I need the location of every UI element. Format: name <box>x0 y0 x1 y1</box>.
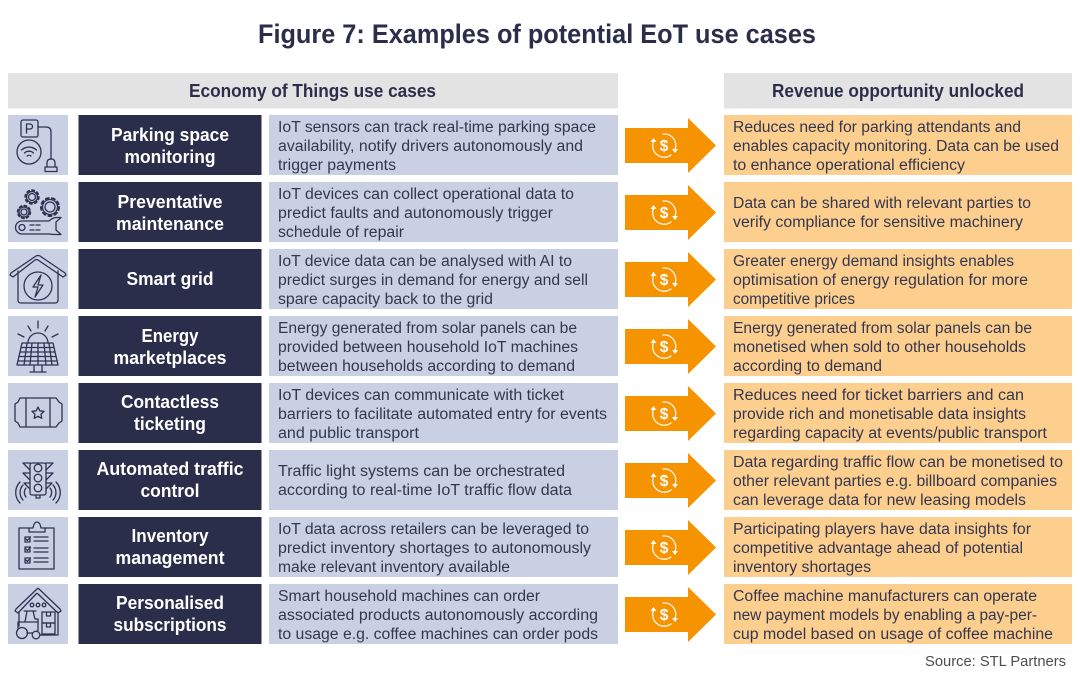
icon: warehouse and forklift <box>15 588 61 639</box>
arrow: $ <box>660 272 669 289</box>
revenue text: cup model based on usage of coffee machine <box>733 626 1053 643</box>
arrow: $ <box>660 607 669 624</box>
name: maintenance <box>116 214 224 234</box>
name <box>114 593 226 635</box>
source: Source: STL Partners <box>925 654 1066 670</box>
name: monitoring <box>124 147 216 167</box>
icon: house with bolt <box>10 256 66 303</box>
revenue text: inventory shortages <box>733 559 871 576</box>
description: IoT devices can communicate with ticket <box>278 387 565 404</box>
description: predict faults and autonomously trigger <box>278 205 553 222</box>
name: Personalised <box>116 593 224 613</box>
arrow <box>625 386 716 441</box>
revenue text: provide rich and monetisable data insights <box>733 406 1026 423</box>
description: IoT devices can collect operational data to <box>278 186 574 203</box>
name: Contactless <box>121 392 219 412</box>
name: Preventative <box>118 192 222 212</box>
name: control <box>140 481 200 501</box>
row 5: contactless ticketing <box>8 383 1072 443</box>
description: IoT device data can be analysed with AI to <box>278 253 572 270</box>
revenue text: other relevant parties e.g. billboard companies <box>733 473 1057 490</box>
description: schedule of repair <box>278 224 404 241</box>
description: predict surges in demand for energy and sell <box>278 272 588 289</box>
description: Smart household machines can order <box>278 588 540 605</box>
description <box>278 186 574 241</box>
revenue text: verify compliance for sensitive machinery <box>733 214 1023 231</box>
description <box>278 463 572 499</box>
arrow <box>625 185 716 240</box>
row 2: preventative maintenance <box>8 182 1072 242</box>
description <box>278 253 588 308</box>
revenue text: Greater energy demand insights enables <box>733 253 1014 270</box>
icon: clipboard <box>19 522 54 569</box>
arrow <box>625 453 716 508</box>
icon: solar panel <box>17 321 58 372</box>
arrow <box>625 252 716 307</box>
revenue text <box>733 588 1053 643</box>
description: IoT sensors can track real-time parking space <box>278 119 596 136</box>
revenue text: according to demand <box>733 358 882 375</box>
arrow: $ <box>660 406 669 423</box>
description: barriers to facilitate automated entry for events <box>278 406 607 423</box>
revenue text: Participating players have data insights for <box>733 521 1031 538</box>
name <box>96 459 244 501</box>
name: Smart grid <box>126 269 214 289</box>
arrow: $ <box>660 339 669 356</box>
header: use cases: Economy of Things use cases <box>189 81 436 101</box>
arrow: $ <box>660 138 669 155</box>
header: use cases <box>8 73 618 108</box>
name <box>111 125 229 167</box>
description <box>278 588 598 643</box>
revenue text: can leverage data for new leasing models <box>733 492 1026 509</box>
header: revenue <box>724 73 1072 108</box>
description: spare capacity back to the grid <box>278 291 493 308</box>
description: availability, notify drivers autonomously and <box>278 138 583 155</box>
revenue text: new payment models by enabling a pay-per- <box>733 607 1037 624</box>
revenue text: Data regarding traffic flow can be monetised to <box>733 454 1063 471</box>
description: and public transport <box>278 425 420 442</box>
revenue text <box>733 521 1031 576</box>
description: to usage e.g. coffee machines can order pods <box>278 626 598 643</box>
icon: parking sensor <box>17 120 57 172</box>
arrow: $ <box>660 473 669 490</box>
name <box>116 526 224 568</box>
description <box>278 521 591 576</box>
arrow <box>625 520 716 575</box>
description <box>278 320 578 375</box>
revenue text: Energy generated from solar panels can be <box>733 320 1032 337</box>
name <box>121 392 219 434</box>
arrow: $ <box>660 540 669 557</box>
row 7: inventory management <box>8 517 1072 577</box>
name: Automated traffic <box>96 459 244 479</box>
description: according to real-time IoT traffic flow data <box>278 482 572 499</box>
revenue text <box>733 320 1032 375</box>
name <box>116 192 224 234</box>
row 4: energy marketplaces <box>8 316 1072 376</box>
description: between households according to demand <box>278 358 575 375</box>
revenue text: Data can be shared with relevant parties to <box>733 195 1031 212</box>
arrow: $ <box>660 205 669 222</box>
name: marketplaces <box>114 348 226 368</box>
description <box>278 119 596 174</box>
revenue text: Reduces need for ticket barriers and can <box>733 387 1024 404</box>
icon: traffic light <box>16 463 60 503</box>
revenue text: enables capacity monitoring. Data can be used <box>733 138 1059 155</box>
revenue text: optimisation of energy regulation for more <box>733 272 1028 289</box>
name: management <box>116 548 224 568</box>
description: Traffic light systems can be orchestrated <box>278 463 565 480</box>
description: make relevant inventory available <box>278 559 510 576</box>
name <box>114 326 226 368</box>
arrow <box>625 118 716 173</box>
description: Energy generated from solar panels can be <box>278 320 577 337</box>
name: ticketing <box>134 414 206 434</box>
description: associated products autonomously according <box>278 607 598 624</box>
title: Figure 7: Examples of potential EoT use cases <box>258 19 816 49</box>
revenue text: monetised when sold to other households <box>733 339 1026 356</box>
revenue text: Coffee machine manufacturers can operate <box>733 588 1037 605</box>
name: Energy <box>142 326 199 346</box>
icon: ticket <box>15 398 62 427</box>
revenue text: to enhance operational efficiency <box>733 157 965 174</box>
revenue text: regarding capacity at events/public transport <box>733 425 1048 442</box>
description: provided between household IoT machines <box>278 339 578 356</box>
revenue text <box>733 119 1059 174</box>
revenue text: competitive prices <box>733 291 855 308</box>
description: predict inventory shortages to autonomously <box>278 540 591 557</box>
revenue text <box>733 387 1048 442</box>
name: subscriptions <box>114 615 226 635</box>
revenue text <box>733 253 1028 308</box>
description: IoT data across retailers can be leveraged to <box>278 521 589 538</box>
revenue text: Reduces need for parking attendants and <box>733 119 1021 136</box>
icon: gears and wrench <box>16 190 61 234</box>
row 3: smart grid <box>8 249 1072 309</box>
name: Parking space <box>111 125 229 145</box>
row 8: personalised subscriptions <box>8 584 1072 644</box>
revenue text: competitive advantage ahead of potential <box>733 540 1023 557</box>
row 1: parking space monitoring <box>8 115 1072 175</box>
revenue text <box>733 454 1063 509</box>
name: Inventory <box>132 526 209 546</box>
row 6: automated traffic control <box>8 450 1072 510</box>
description <box>278 387 607 442</box>
arrow <box>625 587 716 642</box>
header: revenue: Revenue opportunity unlocked <box>772 81 1024 101</box>
arrow <box>625 319 716 374</box>
revenue text <box>733 195 1031 231</box>
description: trigger payments <box>278 157 396 174</box>
